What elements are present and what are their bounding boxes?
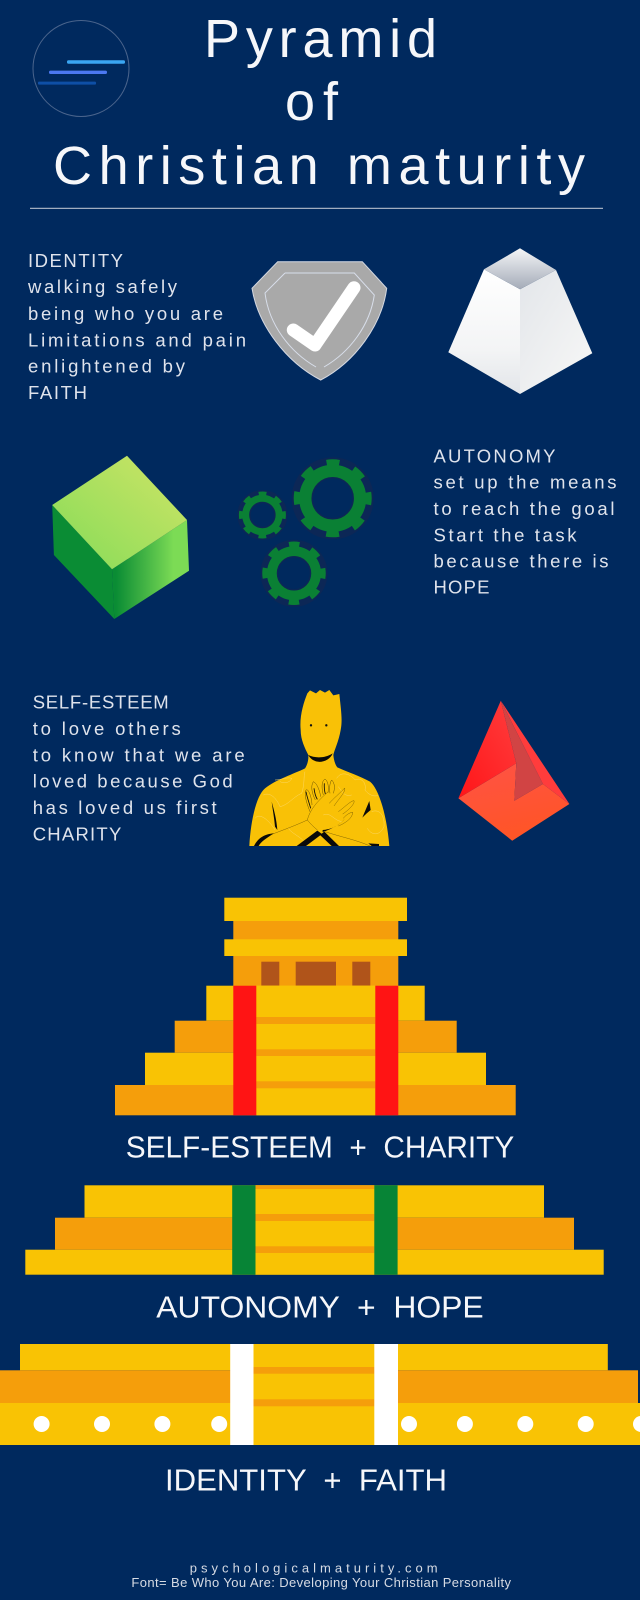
text block: self-esteem: SELF-ESTEEM	[33, 691, 169, 712]
steps	[115, 986, 516, 1115]
text block: identity: FAITH	[28, 382, 87, 403]
central stairs	[256, 1185, 374, 1275]
pyramid level: identity + faith	[0, 1344, 640, 1445]
title	[53, 9, 585, 196]
gear: small	[237, 490, 287, 540]
red pillars	[233, 986, 398, 1115]
text block: identity: enlightened by	[28, 356, 186, 376]
central stairs	[254, 1344, 374, 1445]
icon: green cube	[52, 456, 189, 619]
text block: self-esteem: CHARITY	[33, 823, 121, 844]
text block: autonomy: Start the task	[434, 524, 577, 545]
footer: psychologicalmaturity.com	[190, 1560, 438, 1575]
text block: self-esteem: to love others	[33, 718, 181, 739]
pale contour lines	[255, 772, 384, 843]
text block: autonomy: because there is	[434, 551, 608, 572]
text block: identity: IDENTITY	[28, 250, 123, 271]
text block: autonomy: AUTONOMY	[434, 445, 556, 466]
central stairs	[256, 986, 375, 1115]
footer: Font= Be Who You Are: Developing Your Christian Personality	[131, 1575, 512, 1590]
white pillars	[230, 1344, 398, 1445]
text block: self-esteem: loved because God	[33, 771, 233, 792]
text block: self-esteem: to know that we are	[33, 744, 245, 765]
green pillars	[232, 1185, 398, 1275]
gear: lower	[260, 540, 328, 607]
steps	[25, 1185, 604, 1275]
text block: autonomy: to reach the goal	[434, 498, 614, 519]
pyramid level: self-esteem + charity	[115, 898, 516, 1115]
icon: white truncated pyramid	[448, 248, 592, 394]
text block: identity: Limitations and pain	[28, 330, 246, 350]
text block: self-esteem	[33, 691, 245, 844]
pyramid level: autonomy + hope	[25, 1185, 604, 1275]
temple top	[224, 898, 407, 986]
label: self-esteem + charity: SELF-ESTEEM + CHARITY	[126, 1129, 514, 1164]
text block: self-esteem: has loved us first	[33, 797, 217, 818]
text block: autonomy: set up the means	[434, 472, 616, 493]
text block: autonomy	[434, 445, 616, 598]
icon: red gem	[458, 701, 569, 841]
icon: person with hands on heart	[249, 690, 389, 846]
steps	[0, 1344, 640, 1445]
logo: circle with speed lines	[33, 20, 129, 116]
title: of	[285, 72, 339, 132]
label: autonomy + hope: AUTONOMY + HOPE	[156, 1289, 484, 1324]
text block: autonomy: HOPE	[434, 577, 490, 598]
text block: identity: being who you are	[28, 303, 223, 324]
title: Christian maturity	[53, 136, 585, 196]
hands	[305, 779, 334, 812]
text block: identity	[27, 250, 246, 403]
icon: three green gears	[237, 457, 374, 607]
title: Pyramid	[204, 9, 437, 69]
black shadows	[272, 802, 277, 830]
gear: large	[292, 457, 374, 539]
footer	[131, 1560, 512, 1590]
text block: identity: walking safely	[27, 276, 178, 297]
label: identity + faith: IDENTITY + FAITH	[165, 1463, 447, 1498]
white dots	[34, 1416, 640, 1432]
icon: shield with check mark	[252, 262, 387, 380]
